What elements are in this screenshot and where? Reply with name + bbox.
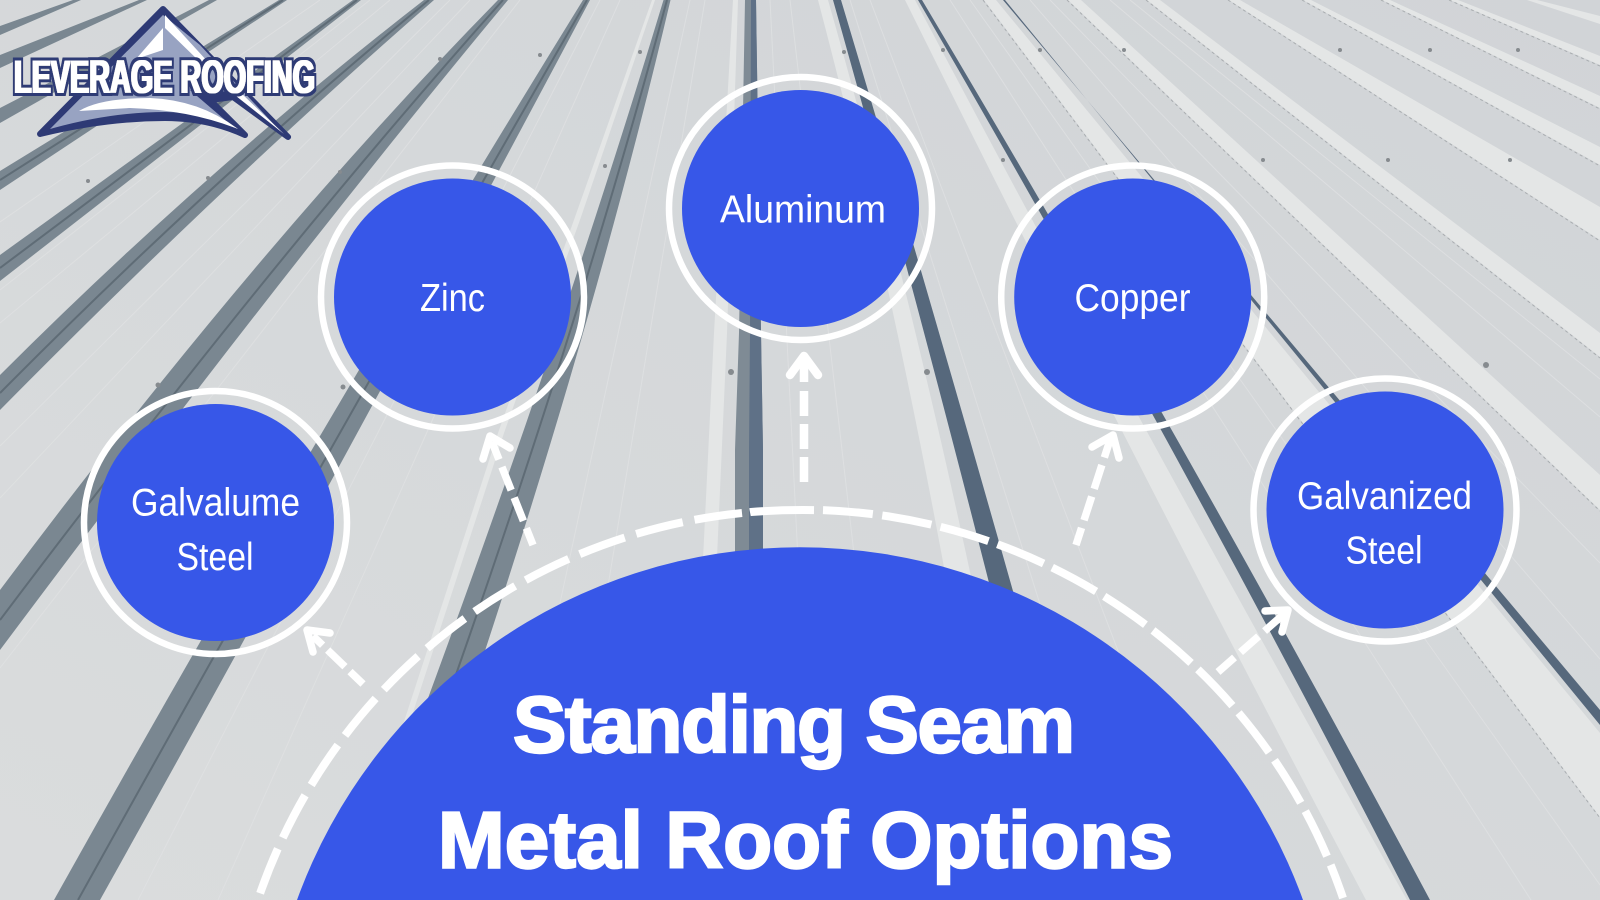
option: Galvalume Steel (84, 391, 347, 654)
title semicircle panel (297, 547, 1303, 900)
option: Galvanized Steel (1254, 378, 1516, 642)
arrow to Galvalume Steel (307, 630, 363, 684)
option: Aluminum (669, 77, 932, 340)
arrow to Galvanized Steel (1218, 610, 1288, 672)
option: Galvalume Steel: Steel (176, 536, 254, 579)
option: Galvanized Steel: Galvanized (1297, 475, 1472, 518)
option: Galvalume Steel: Galvalume (131, 482, 300, 524)
dashed arc around title (258, 510, 1343, 898)
option: Copper: Copper (1074, 277, 1191, 320)
option: Zinc (321, 166, 584, 428)
title text: Standing Seam (513, 680, 1075, 769)
option: Galvanized Steel: Steel (1346, 530, 1422, 572)
logo: Leverage Roofing (14, 9, 315, 137)
arrow to Aluminum (790, 356, 818, 482)
option: Copper (1001, 166, 1264, 428)
arrow to Copper (1076, 435, 1119, 545)
title text: Metal Roof Options (438, 796, 1173, 884)
option: Aluminum: Aluminum (720, 188, 886, 232)
arrow to Zinc (483, 436, 533, 545)
logo: Leverage Roofing: LEVERAGE ROOFING (14, 50, 315, 103)
option: Zinc: Zinc (420, 277, 485, 320)
title text (438, 680, 1173, 884)
